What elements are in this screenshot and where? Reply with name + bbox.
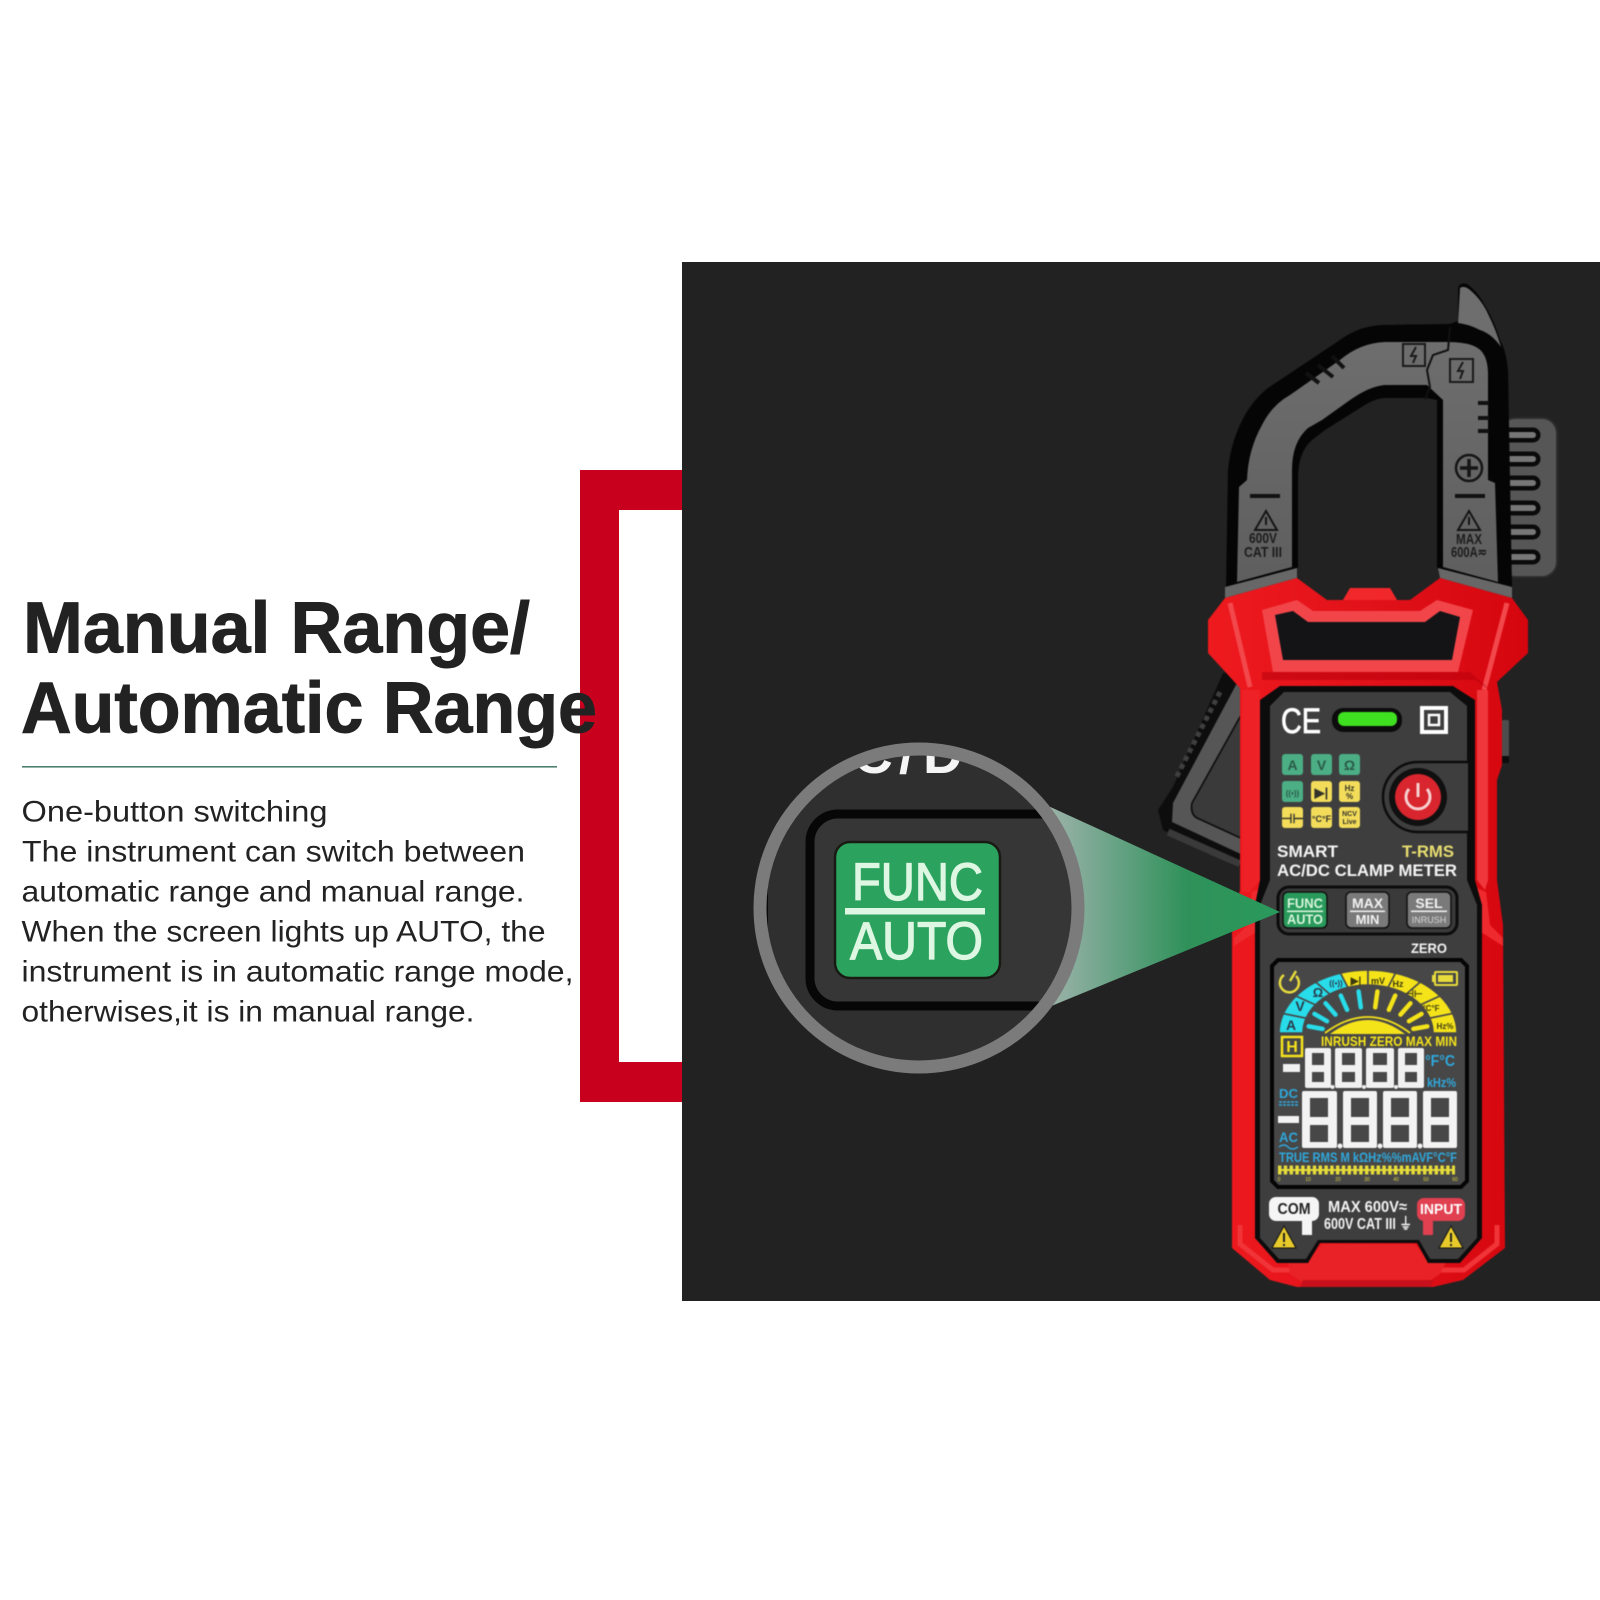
dial labels xyxy=(1286,976,1453,1033)
function icon grid: A xyxy=(1287,757,1298,773)
hold indicator: H xyxy=(1286,1039,1298,1056)
bar scale: 60 xyxy=(1452,1177,1458,1183)
jaw labels: CAT III xyxy=(1244,544,1282,561)
rating text xyxy=(1324,1199,1412,1233)
magnified FUNC AUTO button xyxy=(835,842,1000,978)
unit labels xyxy=(1279,1053,1457,1165)
red body xyxy=(1208,578,1528,1287)
front face xyxy=(1255,686,1482,1263)
bar scale xyxy=(1278,1170,1458,1183)
description text: One-button switching xyxy=(22,796,328,828)
bottom bumper xyxy=(1288,1244,1446,1284)
battery icon xyxy=(1432,972,1457,985)
function dial xyxy=(1279,970,1457,1033)
button well xyxy=(806,810,1042,1010)
description text: instrument is in automatic range mode, xyxy=(22,956,574,988)
dial labels: Hz xyxy=(1392,979,1404,989)
description text: automatic range and manual range. xyxy=(22,876,524,908)
button row xyxy=(1278,887,1457,934)
unit labels: kHz% xyxy=(1427,1075,1456,1090)
model labels: T-RMS xyxy=(1402,843,1454,861)
INPUT terminal label xyxy=(1417,1198,1465,1235)
dial labels: °C°F xyxy=(1422,1004,1440,1013)
MAX MIN button: MIN xyxy=(1356,912,1379,927)
function icon grid: Live xyxy=(1342,819,1357,826)
function icon grid: ▶| xyxy=(1314,785,1328,800)
dial labels: mV xyxy=(1371,976,1385,986)
ZERO label: ZERO xyxy=(1411,940,1447,956)
red bracket frame xyxy=(580,470,682,1102)
dark product panel xyxy=(682,262,1600,1301)
dial labels: A xyxy=(1286,1017,1296,1033)
green indicator xyxy=(1332,708,1402,732)
unit labels: TRUE RMS M kΩHz%%mAVF°C°F xyxy=(1279,1150,1457,1165)
model labels: SMART xyxy=(1277,843,1338,861)
lcd screen xyxy=(1272,960,1467,1187)
divider xyxy=(22,766,557,768)
side grip xyxy=(1500,418,1557,577)
dial labels: Ω xyxy=(1313,985,1323,1000)
INPUT terminal label: INPUT xyxy=(1420,1201,1462,1218)
FUNC AUTO button: FUNC xyxy=(1287,895,1323,911)
function icon grid: Ω xyxy=(1344,757,1355,773)
description text: The instrument can switch between xyxy=(22,836,525,868)
title: Automatic Range xyxy=(21,668,597,748)
SEL INRUSH button xyxy=(1407,892,1451,928)
rating text: MAX 600V≈ xyxy=(1328,1199,1407,1216)
function icon grid: ((•)) xyxy=(1286,789,1300,798)
bar scale: 10 xyxy=(1305,1177,1311,1183)
dial labels: V xyxy=(1295,998,1305,1014)
COM terminal label xyxy=(1269,1197,1319,1235)
title xyxy=(21,588,597,748)
SEL INRUSH button: SEL xyxy=(1415,895,1443,911)
bar scale: 50 xyxy=(1423,1177,1429,1183)
function icon grid: NCV xyxy=(1342,811,1357,818)
rear trigger handle xyxy=(1158,670,1245,867)
dial labels: ((•)) xyxy=(1329,979,1343,988)
jaw nose tip xyxy=(1458,287,1501,347)
function icon grid: °C°F xyxy=(1312,814,1332,824)
title: Manual Range/ xyxy=(23,588,530,668)
lens ring xyxy=(760,749,1078,1067)
grip ticks xyxy=(1250,356,1489,496)
clamp meter xyxy=(1158,284,1557,1287)
bar scale: 0 xyxy=(1278,1177,1281,1183)
description text: otherwises,it is in manual range. xyxy=(22,996,475,1028)
magnified label fragment: C/DC xyxy=(853,723,1023,785)
lower body strip xyxy=(1240,1225,1497,1270)
dial dome xyxy=(1325,1017,1410,1034)
warning triangles xyxy=(1255,511,1480,530)
function icon grid: V xyxy=(1317,757,1327,773)
model labels xyxy=(1277,843,1457,880)
model labels: AC/DC CLAMP METER xyxy=(1277,862,1457,880)
top window xyxy=(1262,600,1473,672)
warning icons xyxy=(1272,1226,1463,1248)
bolt marks xyxy=(1403,344,1473,382)
magnified FUNC AUTO button: FUNC xyxy=(852,853,983,912)
callout: green zoom beam xyxy=(1046,805,1280,1007)
function icon grid: Hz xyxy=(1345,784,1354,793)
SEL INRUSH button: INRUSH xyxy=(1412,915,1446,925)
jaw labels: 600A≂ xyxy=(1451,544,1487,561)
lower seven-segment readout xyxy=(1278,1091,1457,1148)
magnifier xyxy=(754,742,1084,1074)
CE mark: CE xyxy=(1281,702,1321,741)
MAX MIN button xyxy=(1346,892,1389,928)
jaw labels: MAX xyxy=(1456,531,1482,548)
bar scale: 40 xyxy=(1393,1177,1399,1183)
unit labels: °F°C xyxy=(1425,1053,1455,1070)
jaw seam xyxy=(1425,327,1450,399)
jaw labels xyxy=(1244,530,1487,561)
function icon grid xyxy=(1281,754,1360,828)
clamp jaw xyxy=(1225,284,1512,598)
function icon grid: ⊣⊢ xyxy=(1281,811,1304,826)
unit labels: DC xyxy=(1279,1086,1299,1101)
bar scale: 30 xyxy=(1364,1177,1370,1183)
double insulation mark xyxy=(1422,708,1446,732)
cross screw xyxy=(1456,455,1482,481)
hold indicator xyxy=(1282,1037,1302,1056)
standby icon xyxy=(1280,971,1299,992)
upper seven-segment readout xyxy=(1283,1048,1424,1089)
description text xyxy=(22,796,574,1028)
dial ticks xyxy=(1309,992,1427,1029)
FUNC AUTO button xyxy=(1283,892,1327,928)
bar scale: 20 xyxy=(1335,1177,1341,1183)
magnified FUNC AUTO button: AUTO xyxy=(850,912,983,971)
mode labels: INRUSH ZERO MAX MIN xyxy=(1321,1033,1457,1049)
function icon grid: % xyxy=(1346,792,1353,801)
body highlights xyxy=(1230,603,1507,690)
rating text: 600V CAT III ⏚ xyxy=(1324,1215,1412,1233)
description text: When the screen lights up AUTO, the xyxy=(22,916,546,948)
dial labels: ⊣⊢ xyxy=(1405,989,1423,1000)
MAX MIN button: MAX xyxy=(1352,895,1384,911)
dial labels: Hz% xyxy=(1437,1022,1453,1031)
side button xyxy=(1502,720,1509,763)
jaw labels: 600V xyxy=(1249,530,1277,547)
FUNC AUTO button: AUTO xyxy=(1287,911,1323,927)
unit labels: AC xyxy=(1279,1129,1298,1145)
COM terminal label: COM xyxy=(1278,1201,1310,1218)
dial labels: ▶| xyxy=(1350,976,1361,987)
power button xyxy=(1383,762,1468,832)
